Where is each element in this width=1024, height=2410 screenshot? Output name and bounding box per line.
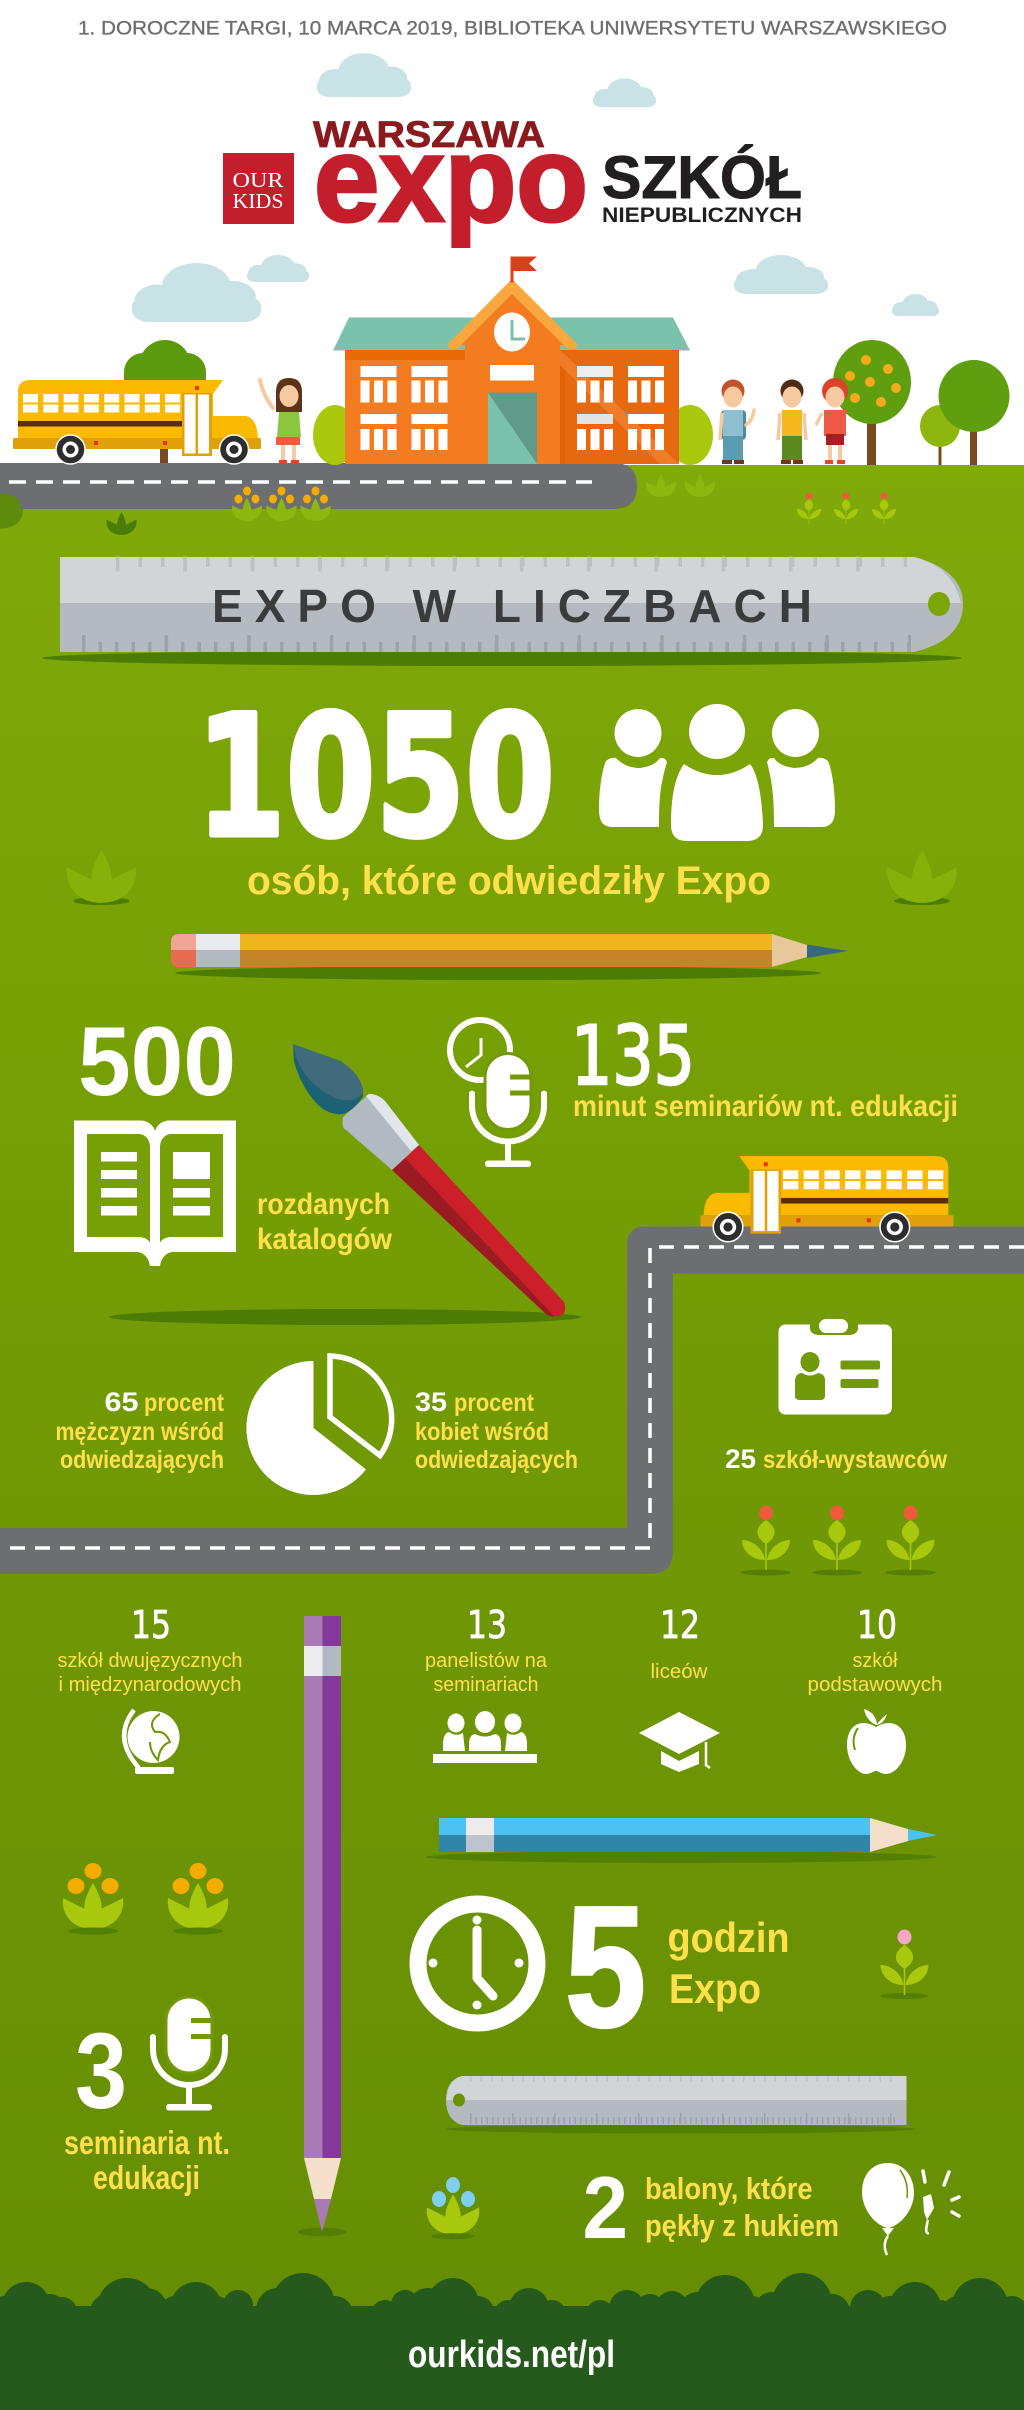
pie chart xyxy=(246,1356,392,1495)
school roof xyxy=(333,318,690,350)
red tulips xyxy=(741,1506,936,1576)
logo: Our Kids Expo xyxy=(223,111,802,247)
stat: 15 bilingual schools: i międzynarodowych xyxy=(58,1674,241,1696)
men caption: mężczyzn wśród xyxy=(56,1418,224,1446)
icon: panel xyxy=(433,1711,537,1763)
child: girl red xyxy=(816,378,848,464)
stat: 3 seminars xyxy=(64,1997,230,2196)
tree with oranges xyxy=(833,340,911,465)
women caption: 35 xyxy=(415,1387,447,1417)
stat: gender split xyxy=(56,1356,578,1495)
pencil: orange xyxy=(171,934,848,980)
number 5: 5 xyxy=(565,1871,646,2063)
stat: 13 panelists xyxy=(425,1603,548,1763)
flower: pink xyxy=(880,1930,928,1999)
stat: 25 exhibitors xyxy=(725,1319,947,1474)
icon: apple xyxy=(847,1709,906,1774)
caption: panelistów na xyxy=(425,1650,548,1672)
side bushes xyxy=(313,405,713,465)
website: ourkids.net/pl xyxy=(408,2334,615,2376)
women caption: odwiedzających xyxy=(415,1446,578,1474)
stat: 2 balloons xyxy=(582,2158,959,2257)
number 12: 12 xyxy=(660,1603,700,1647)
small tree xyxy=(920,405,960,465)
road: top xyxy=(0,463,637,509)
caption: balony, które xyxy=(645,2171,812,2206)
logo: Our Kids square: OUR xyxy=(232,168,284,192)
school bus right xyxy=(700,1156,953,1242)
caption: szkół xyxy=(852,1650,898,1672)
number 500: 500 xyxy=(78,1006,236,1116)
icon: ID badge xyxy=(778,1319,892,1414)
road: winding xyxy=(0,1226,1024,1574)
men caption: 65 xyxy=(104,1387,138,1417)
logo: Szkół: SZKÓŁ xyxy=(602,144,802,211)
caption: 25 xyxy=(725,1444,756,1474)
number 1050: 1050 xyxy=(196,679,555,875)
stat: 2 balloons: pękły z hukiem xyxy=(645,2208,839,2243)
flower: blue xyxy=(427,2177,479,2239)
caption: godzin xyxy=(668,1914,790,1961)
event date line: 1. DOROCZNE TARGI, 10 MARCA 2019, BIBLIOTEKA UNIWERSYTETU WARSZAWSKIEGO xyxy=(78,18,947,40)
logo: Warszawa: WARSZAWA xyxy=(313,114,545,155)
ruler: small xyxy=(446,2076,916,2134)
child: girl waving xyxy=(260,378,302,464)
paintbrush xyxy=(109,1044,581,1325)
stat: 1050 visitors xyxy=(196,679,835,903)
caption: seminaria nt. xyxy=(64,2124,230,2161)
stat: 25 exhibitors: szkół-wystawców xyxy=(763,1446,947,1474)
logo: niepublicznych: NIEPUBLICZNYCH xyxy=(602,203,802,227)
caption: minut seminariów nt. edukacji xyxy=(573,1090,958,1123)
stat: 3 seminars: edukacji xyxy=(93,2159,200,2196)
caption: szkół dwujęzycznych xyxy=(58,1650,242,1672)
shrub left xyxy=(67,850,136,905)
tree right xyxy=(938,360,1010,465)
stat: 135 minutes xyxy=(450,1010,958,1167)
icon: clock and microphone xyxy=(450,1020,544,1167)
stat: 5 hours: Expo xyxy=(669,1965,761,2012)
women caption: procent xyxy=(454,1389,535,1417)
school building xyxy=(333,256,690,464)
number 10: 10 xyxy=(857,1603,897,1647)
stat: 12 high schools xyxy=(639,1603,720,1772)
logo: Our Kids square: KIDS xyxy=(232,189,284,213)
stat: 15 bilingual schools xyxy=(58,1603,242,1774)
clock xyxy=(494,312,530,352)
stat: 5 hours xyxy=(418,1871,790,2063)
door xyxy=(488,392,537,464)
stat: 10 primary schools: podstawowych xyxy=(808,1674,942,1696)
ruler: heading banner xyxy=(42,557,963,666)
icon: big clock xyxy=(418,1904,537,2023)
women caption: kobiet wśród xyxy=(415,1418,549,1446)
icon: globe xyxy=(124,1710,180,1774)
stat: 500 catalogues xyxy=(74,1006,393,1266)
number 2: 2 xyxy=(582,2158,628,2257)
heading: EXPO W LICZBACH xyxy=(212,580,812,632)
number 135: 135 xyxy=(571,1010,695,1104)
pencil: blue xyxy=(426,1818,937,1863)
number 3: 3 xyxy=(75,2010,127,2131)
men caption xyxy=(56,1387,225,1474)
icon: open book xyxy=(74,1120,236,1266)
icon: microphone xyxy=(153,1997,225,2110)
number 13: 13 xyxy=(467,1603,507,1647)
icon: graduation cap xyxy=(639,1712,720,1772)
women caption xyxy=(415,1387,578,1474)
icon: popped balloon xyxy=(862,2163,959,2255)
clouds xyxy=(132,53,939,322)
stat: 10 primary schools xyxy=(808,1603,942,1774)
forest footer xyxy=(0,2273,1024,2410)
flowers: yellow pair xyxy=(63,1863,228,1934)
tree behind bus xyxy=(124,340,206,465)
school bus left xyxy=(13,380,261,464)
flag xyxy=(510,256,537,282)
stat: 500 catalogues: katalogów xyxy=(257,1223,393,1256)
caption: rozdanych xyxy=(257,1188,390,1221)
pencil: purple vertical xyxy=(298,1616,346,2236)
logo: Our Kids square xyxy=(223,153,294,224)
stat: 13 panelists: seminariach xyxy=(434,1674,538,1696)
windows xyxy=(360,365,664,450)
child: boy yellow xyxy=(778,380,806,464)
bush at left edge xyxy=(0,494,23,528)
icon: people xyxy=(599,704,835,841)
logo: expo: expo xyxy=(314,111,588,247)
number 15: 15 xyxy=(131,1603,171,1647)
men caption: procent xyxy=(144,1389,225,1417)
sky background xyxy=(0,0,1024,470)
ground decorations: shrubs and flowers xyxy=(106,474,896,535)
caption: osób, które odwiedziły Expo xyxy=(247,859,771,903)
school gable xyxy=(449,280,575,345)
caption: liceów xyxy=(650,1661,708,1683)
shrub right xyxy=(887,850,957,905)
child: boy blue xyxy=(720,380,754,464)
men caption: odwiedzających xyxy=(60,1446,224,1474)
